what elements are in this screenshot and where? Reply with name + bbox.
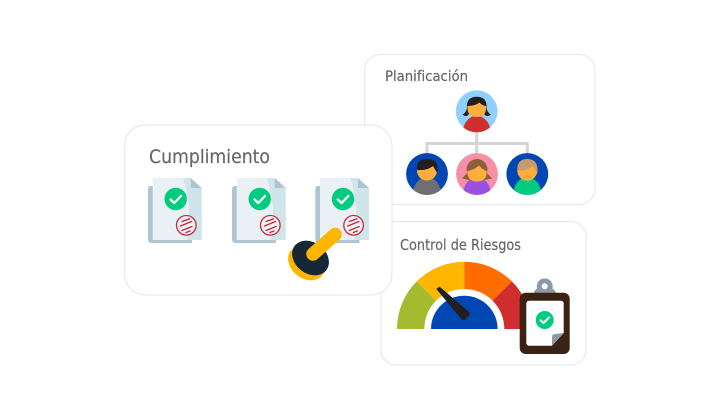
panel: cumplimiento [124,125,392,295]
heading: cumplimiento: Cumplimiento [149,146,270,168]
gauge segment: orange [464,262,512,301]
gauge [397,262,532,329]
avatar: man in grey [406,153,448,195]
avatar: woman in purple [456,153,498,195]
icon: check badge [536,311,554,329]
panel: control de riesgos [381,222,586,365]
heading: control de riesgos: Control de Riesgos [400,236,521,254]
gauge dial: blue [431,296,498,329]
avatar: man in green [506,153,548,195]
icon: document 2 [232,178,286,243]
gauge segment: green [397,281,436,329]
icon: document 3 [315,178,369,243]
infographic [124,54,596,366]
gauge needle [437,287,469,320]
heading: planificación: Planificación [385,69,468,85]
icon: document 1 [148,178,202,243]
avatar: lead woman [456,90,498,132]
icon: clipboard [520,278,570,354]
panel: planificación [364,54,595,213]
icon: rubber stamp [281,233,336,288]
gauge segment: yellow [417,262,464,301]
org chart connectors [427,130,527,154]
gauge segment: red [493,281,532,329]
